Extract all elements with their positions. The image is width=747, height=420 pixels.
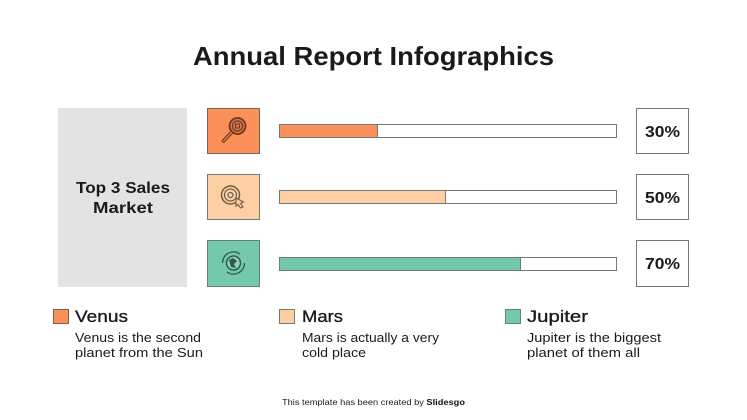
legend: Mars: Mars bbox=[302, 307, 343, 326]
value box: 30%: 30% bbox=[645, 124, 680, 141]
panel: top 3 sales market: Market bbox=[93, 200, 154, 217]
bar chart: Mars 50% bbox=[280, 190, 616, 204]
value box: 70%: 70% bbox=[645, 256, 680, 273]
bar chart: Jupiter 70% bbox=[280, 258, 616, 270]
legend: Mars bbox=[280, 307, 440, 360]
panel: top 3 sales market bbox=[58, 108, 187, 287]
value box: 30% bbox=[636, 108, 688, 154]
legend: Venus bbox=[54, 307, 203, 360]
legend: Venus: Venus is the second bbox=[75, 330, 201, 345]
legend: Jupiter: Jupiter bbox=[527, 307, 588, 326]
legend: Mars: Mars is actually a very bbox=[302, 330, 440, 345]
legend: Venus: Venus bbox=[75, 307, 128, 326]
panel: top 3 sales market: Top 3 Sales bbox=[76, 180, 170, 197]
legend: Jupiter: Jupiter is the biggest bbox=[527, 330, 661, 345]
legend: Venus: planet from the Sun bbox=[75, 345, 203, 360]
value box: 50%: 50% bbox=[645, 190, 680, 207]
icon: coin with cursor on peach tile bbox=[208, 174, 260, 220]
value box: 50% bbox=[636, 174, 688, 220]
bar chart: Venus 30% bbox=[280, 124, 616, 138]
title: Annual Report Infographics bbox=[193, 41, 554, 71]
legend: Mars: cold place bbox=[302, 345, 366, 360]
value box: 70% bbox=[636, 240, 688, 286]
legend: Jupiter bbox=[506, 307, 661, 360]
legend: Jupiter: planet of them all bbox=[527, 345, 640, 360]
footer credit: This template has been created by Slidesgo bbox=[282, 397, 465, 407]
icon: globe on green tile bbox=[208, 240, 260, 286]
icon: magnifying glass on orange tile bbox=[208, 108, 260, 154]
